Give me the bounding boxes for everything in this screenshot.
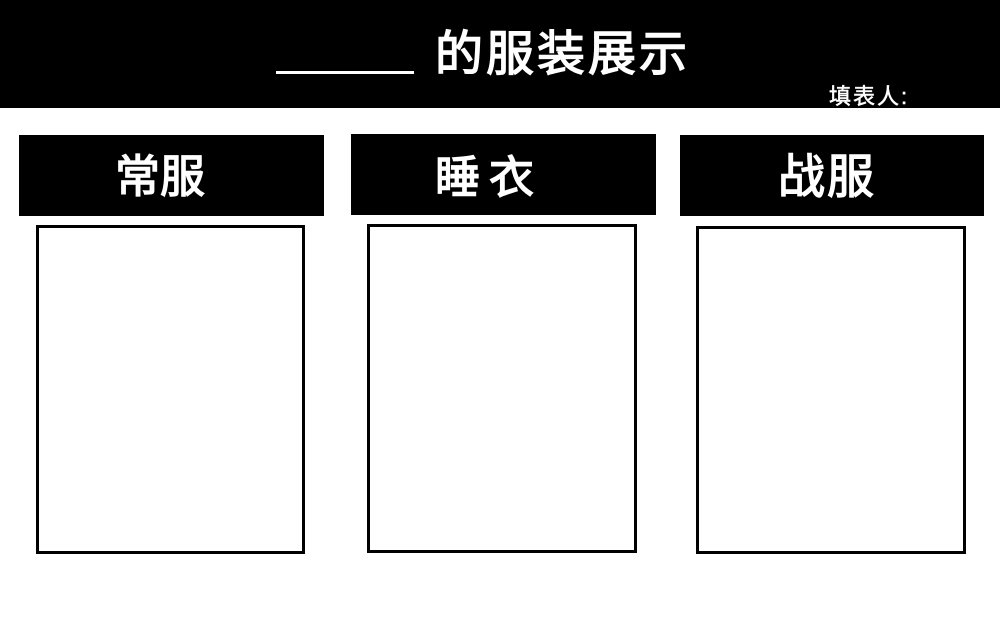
- filled by label: 填表人:: [829, 84, 909, 109]
- heading: battle uniform: 战服: [778, 150, 876, 203]
- panel: battle uniform frame: [696, 226, 966, 554]
- heading: battle uniform: [680, 135, 984, 216]
- title banner: [0, 0, 1000, 108]
- heading: casual wear: 常服: [115, 151, 205, 202]
- panel: casual wear frame: [36, 225, 305, 554]
- title blank line: [276, 71, 414, 74]
- panel: pajamas frame: [367, 224, 637, 553]
- heading: casual wear: [19, 135, 324, 216]
- heading: pajamas: 睡衣: [435, 152, 543, 203]
- heading: pajamas: [351, 134, 656, 214]
- title text: 的服装展示: [435, 28, 690, 81]
